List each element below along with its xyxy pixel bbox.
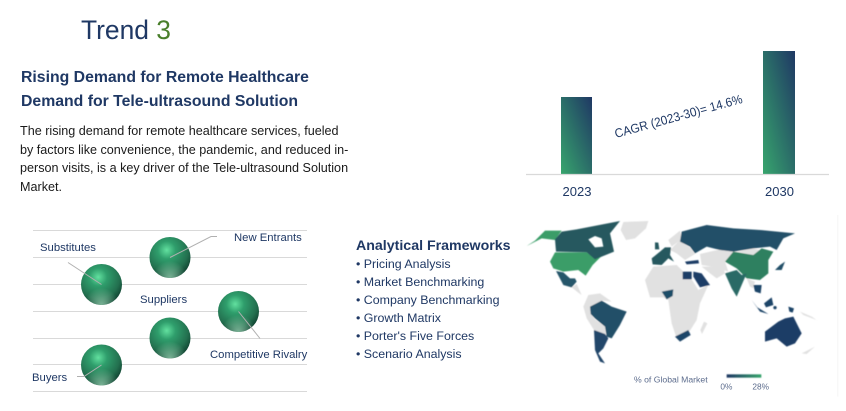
label: suppliers: Suppliers	[140, 294, 187, 306]
legend bar	[727, 374, 761, 378]
legend max: 28%	[752, 382, 770, 392]
label: competitive rivalry: Competitive Rivalry	[210, 349, 308, 361]
canada	[555, 221, 620, 260]
india	[725, 270, 747, 297]
russia	[680, 225, 795, 253]
japan korea	[775, 262, 785, 270]
alaska	[527, 231, 562, 246]
body text	[20, 124, 348, 194]
label: substitutes: Substitutes	[40, 242, 96, 254]
china	[725, 248, 773, 280]
sphere: competitive rivalry	[218, 291, 259, 332]
body text: person visits, is a key driver of the Tele-ultrasound Solution	[20, 161, 348, 175]
list items	[356, 257, 499, 361]
sphere: substitutes	[81, 264, 122, 305]
bar 2023	[561, 97, 592, 174]
bar 2030	[763, 51, 795, 174]
label: new entrants: New Entrants	[234, 232, 302, 244]
argentina chile	[594, 330, 608, 363]
list heading: Analytical Frameworks	[356, 238, 511, 254]
turkey	[685, 260, 699, 264]
europe	[652, 242, 674, 265]
analytical frameworks list	[356, 238, 511, 361]
brazil	[590, 301, 627, 338]
egypt	[683, 272, 692, 279]
southeast asia	[752, 285, 794, 314]
title: Trend 3	[81, 15, 171, 45]
label 2023: 2023	[563, 184, 591, 199]
list items: • Pricing Analysis	[356, 257, 451, 271]
mexico	[556, 271, 577, 287]
label 2030: 2030	[765, 184, 794, 199]
body text: by factors like convenience, the pandemic, and reduced in-	[20, 143, 348, 157]
world map	[527, 215, 838, 396]
label: buyers: Buyers	[32, 372, 68, 384]
list items: • Company Benchmarking	[356, 293, 499, 307]
heading: Demand for Tele-ultrasound Solution	[21, 92, 298, 110]
usa	[550, 252, 601, 276]
list items: • Market Benchmarking	[356, 275, 484, 289]
list items: • Scenario Analysis	[356, 347, 462, 361]
australia	[765, 317, 802, 347]
legend min: 0%	[720, 382, 733, 392]
body text: Market.	[20, 180, 62, 194]
list items: • Growth Matrix	[356, 311, 441, 325]
body text: The rising demand for remote healthcare services, fueled	[20, 124, 339, 138]
legend title: % of Global Market	[634, 374, 708, 384]
nigeria	[662, 289, 673, 299]
list items: • Porter's Five Forces	[356, 329, 474, 343]
heading: Rising Demand for Remote Healthcare	[21, 69, 309, 86]
CAGR label: CAGR (2023-30)= 14.6%	[613, 92, 744, 141]
sphere: new entrants	[150, 237, 190, 278]
sphere: suppliers	[150, 318, 190, 358]
saudi arabia	[693, 272, 710, 287]
south africa	[675, 330, 691, 342]
sphere: buyers	[81, 344, 122, 386]
heading	[21, 69, 309, 110]
